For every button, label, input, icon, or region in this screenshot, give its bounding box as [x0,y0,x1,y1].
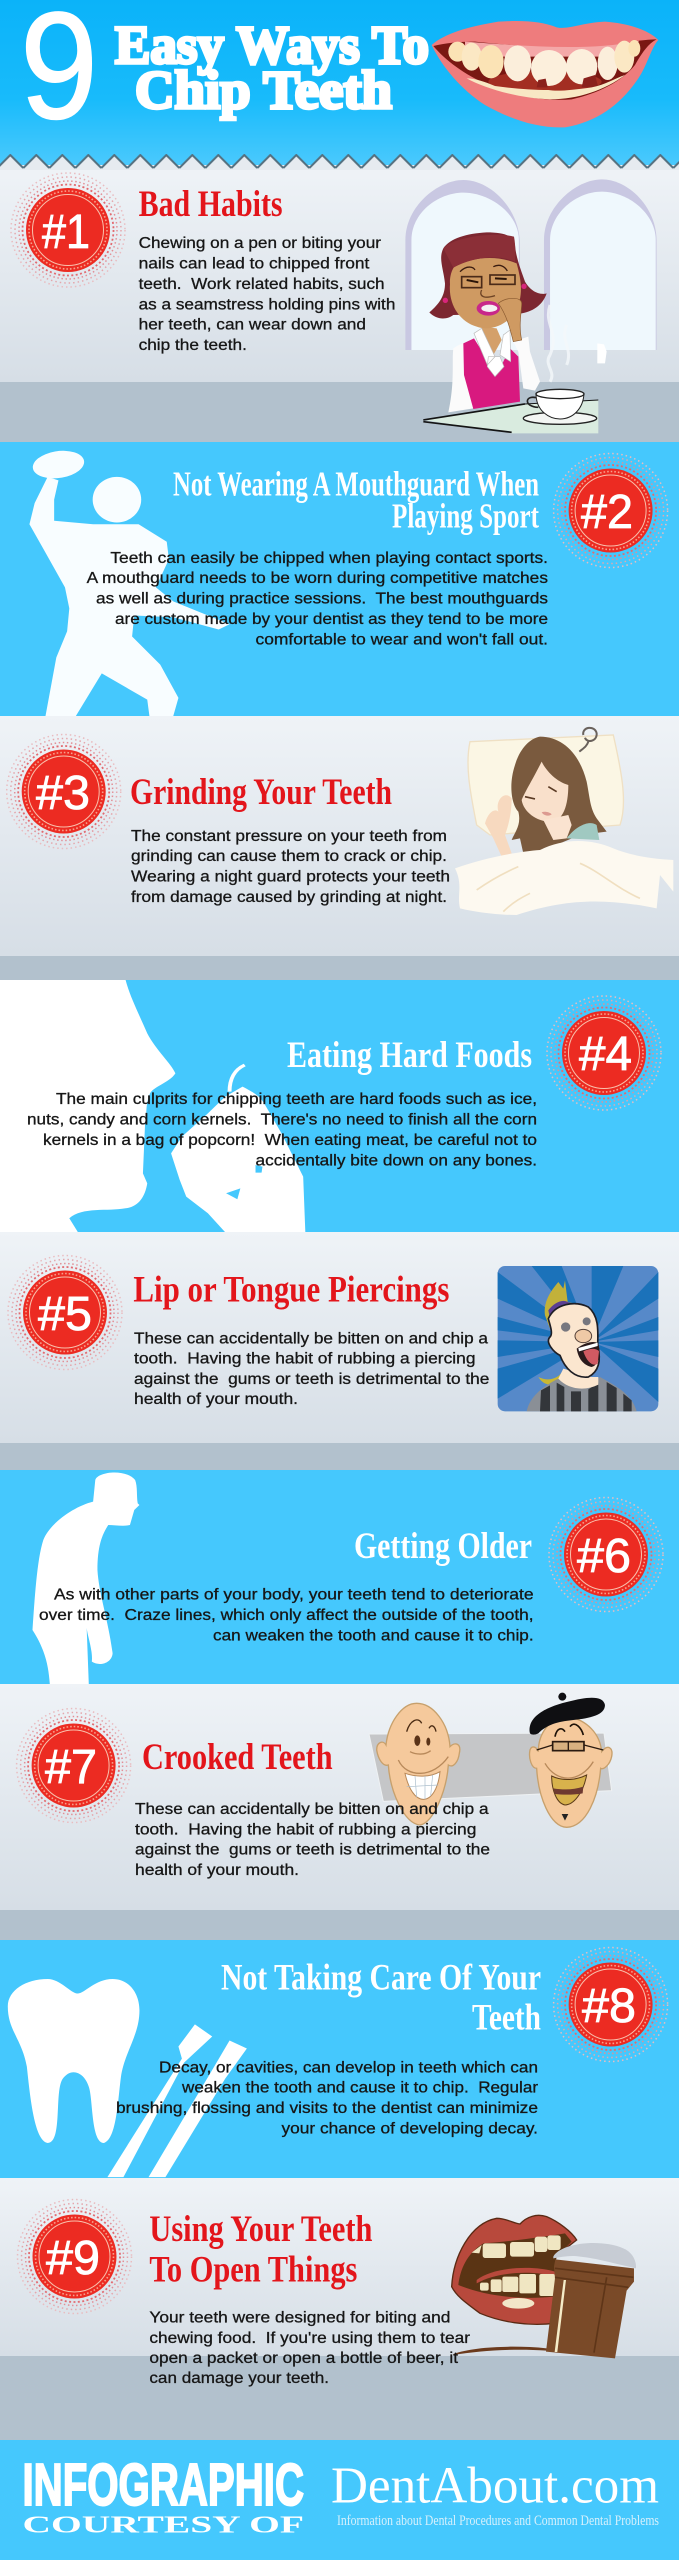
text block 2 [87,550,548,649]
text block 9 [149,2310,471,2387]
badge 1 [11,173,125,287]
heading 7: Crooked Teeth [142,1737,333,1778]
text block 1: nails can lead to chipped front [139,256,370,272]
badge 4: #4 [579,1028,632,1081]
badge 5 [8,1256,122,1370]
text block 4: accidentally bite down on any bones. [256,1152,537,1169]
text block 8: your chance of developing decay. [282,2121,538,2138]
badge 7: #7 [45,1741,97,1794]
text block 4: kernels in a bag of popcorn! When eating meat, be careful not to [43,1132,537,1149]
badge 3 [7,734,121,848]
text block 5: health of your mouth. [134,1391,298,1408]
footer [0,2440,679,2560]
icon: stooped elderly man silhouette [32,1472,139,1684]
text block 2: A mouthguard needs to be worn during competitive matches [87,570,548,587]
icon: woman biting nails with coffee [423,232,607,433]
text block 2: Teeth can easily be chipped when playing contact sports. [110,550,548,567]
badge 5: #5 [38,1288,92,1341]
text block 2: comfortable to wear and won't fall out. [256,632,548,649]
text block 4 [27,1091,537,1169]
heading 5: Lip or Tongue Piercings [133,1270,449,1311]
text block 3: grinding can cause them to crack or chip. [131,848,447,865]
footer brand: DentAbout.com [331,2458,659,2514]
text block 1: as a seamstress holding pins with [139,296,395,313]
text block 2: as well as during practice sessions. The best mouthguards [96,590,548,608]
badge 8: #8 [582,1980,636,2033]
text block 9: can damage your teeth. [149,2370,329,2387]
heading 3: Grinding Your Teeth [130,772,392,813]
icon: two grinning cartoon faces [369,1693,612,1827]
panel 1: bad habits [0,154,679,442]
text block 9: Your teeth were designed for biting and [149,2310,450,2326]
title [115,15,429,120]
heading 6: Getting Older [354,1526,532,1567]
icon: pierced punk cartoon [498,1266,658,1411]
header band [0,0,679,165]
badge 6: #6 [577,1530,631,1583]
badge 1: #1 [42,206,90,259]
panel 8: dental care [0,1940,679,2178]
title: Easy Ways To [115,15,429,75]
text block 7: These can accidentally be bitten on and chip a [135,1801,489,1818]
text block 6: can weaken the tooth and cause it to chip. [213,1627,534,1644]
text block 4: nuts, candy and corn kernels. There's no need to finish all the corn [27,1112,537,1129]
badge 3: #3 [36,767,90,820]
heading 9: Using Your Teeth [149,2209,373,2250]
text block 9: open a packet or open a bottle of beer, it [149,2350,459,2367]
text block 8 [116,2060,539,2138]
text block 7: tooth. Having the habit of rubbing a piercing [135,1821,476,1838]
text block 1: her teeth, can wear down and [139,317,366,334]
text block 3: from damage caused by grinding at night. [131,889,447,906]
icon: face and hand silhouette [0,980,305,1232]
panel 9: opening things [0,2178,679,2440]
text block 5: tooth. Having the habit of rubbing a piercing [134,1351,476,1368]
panel 3: grinding [0,716,679,980]
heading 2: Playing Sport [392,497,539,536]
heading 2 [173,464,539,536]
heading 8: Teeth [472,1998,541,2039]
panel 6: getting older [0,1470,679,1684]
text block 1: teeth. Work related habits, such [139,276,385,293]
text block 6 [39,1586,534,1644]
badge 4 [547,996,661,1110]
icon: sleeping woman [455,728,673,915]
text block 8: Decay, or cavities, can develop in teeth which can [159,2060,538,2077]
heading 9 [149,2209,373,2290]
text block 1: chip the teeth. [139,337,247,354]
footer credit: infographic: INFOGRAPHIC [22,2452,304,2518]
text block 5: against the gums or teeth is detrimental to the [134,1371,490,1388]
heading 8: Not Taking Care Of Your [221,1958,541,1998]
text block 1: Chewing on a pen or biting your [139,235,382,252]
text block 7: against the gums or teeth is detrimental to the [135,1842,490,1859]
icon: smiling mouth with chipped teeth [432,21,658,127]
text block 5: These can accidentally be bitten on and chip a [134,1330,488,1347]
text block 1 [139,235,395,354]
title: Chip Teeth [135,60,392,120]
panel 5: piercings [0,1232,679,1470]
panel 2: mouthguard [0,442,679,716]
text block 2: are custom made by your dentist as they tend to be more [115,611,548,628]
panel 4: hard foods [0,980,679,1232]
panel 7: crooked teeth [0,1684,679,1940]
heading 8 [221,1958,541,2039]
heading 1: Bad Habits [139,184,283,225]
icon: arched windows [405,179,657,350]
text block 3 [131,828,450,906]
footer credit: courtesy of: COURTESY OF [22,2513,304,2539]
text block 4: The main culprits for chipping teeth are hard foods such as ice, [56,1091,537,1108]
text block 9: chewing food. If you're using them to tear [149,2330,471,2347]
heading 2: Not Wearing A Mouthguard When [173,464,539,503]
text block 7 [135,1801,490,1879]
icon: mouth biting bottle cap [452,2215,636,2358]
badge 2 [554,454,668,568]
badge 6 [549,1498,663,1612]
text block 6: As with other parts of your body, your teeth tend to deteriorate [54,1586,534,1603]
text block 3: The constant pressure on your teeth from [131,828,447,845]
text block 5 [134,1330,490,1408]
text block 7: health of your mouth. [135,1862,299,1879]
badge 9 [18,2200,132,2314]
text block 6: over time. Craze lines, which only affect the outside of the tooth, [39,1607,534,1624]
badge 9: #9 [46,2232,100,2285]
text block 8: weaken the tooth and cause it to chip. Regular [181,2080,539,2097]
text block 8: brushing, flossing and visits to the dentist can minimize [116,2100,538,2117]
badge 8 [554,1948,668,2062]
text block 3: Wearing a night guard protects your teeth [131,868,450,885]
badge 7 [17,1708,131,1822]
heading 9: To Open Things [149,2250,357,2290]
icon: football player silhouette [29,447,230,716]
icon: tooth and toothbrushes silhouette [8,1979,247,2177]
heading 4: Eating Hard Foods [287,1035,532,1076]
badge 2: #2 [581,486,633,539]
